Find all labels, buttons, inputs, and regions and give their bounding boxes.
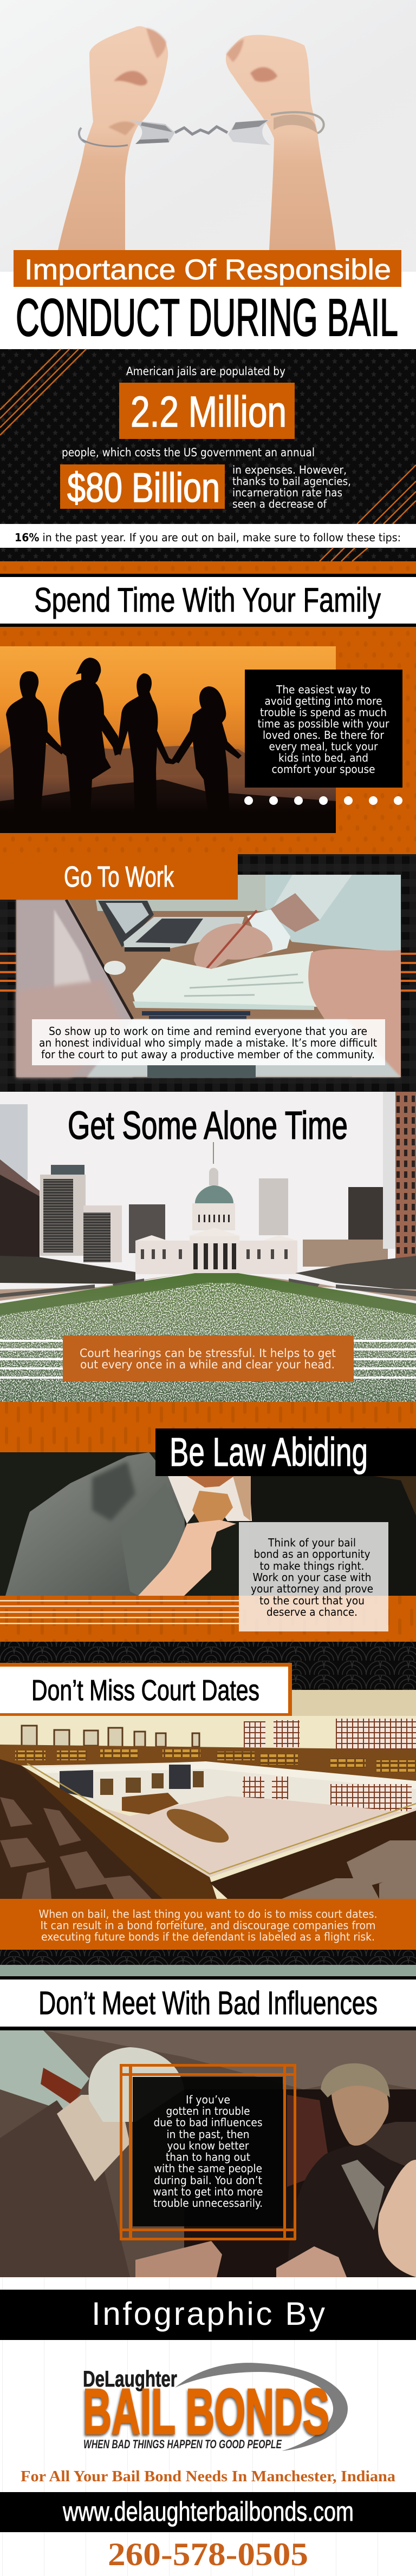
text box: bad influences: due to bad influences xyxy=(154,2116,262,2129)
photo: man adjusting tie xyxy=(0,1452,416,1596)
note: law abiding text: to the court that you xyxy=(259,1594,365,1607)
ceiling xyxy=(292,1690,416,1716)
panel: spend time with your family xyxy=(0,561,416,854)
heading: dont miss court dates xyxy=(0,1663,292,1716)
photo: old courthouse and city skyline xyxy=(0,1092,416,1402)
text box: bad influences: during bail. You don’t xyxy=(154,2174,262,2187)
panel: dont meet with bad influences xyxy=(0,1965,416,2277)
note: court dates text xyxy=(0,1899,416,1950)
left arm and fist xyxy=(58,26,168,250)
logo swoosh xyxy=(175,2363,348,2451)
note: go to work text: an honest individual who simply made a mistake. It’s more difficult xyxy=(39,1036,377,1049)
text box: family: trouble is spend as much xyxy=(260,706,387,719)
heading: spend time xyxy=(0,574,416,627)
text box: family: time as possible with your xyxy=(258,717,389,730)
silhouette: woman left xyxy=(6,671,64,833)
trees and street furniture xyxy=(0,1256,135,1284)
hand xyxy=(138,1520,236,1596)
gallery wood band xyxy=(0,1745,416,1784)
left cuff ring back xyxy=(79,128,126,146)
dark glass tower xyxy=(129,1204,165,1253)
rostrum xyxy=(122,1793,179,1814)
note: law abiding text: your attorney and prove xyxy=(251,1582,373,1595)
snow specks on lawn xyxy=(0,1283,416,1402)
ground bushes xyxy=(0,779,336,833)
right wall and seating xyxy=(210,1811,416,1899)
right hand foreground xyxy=(378,2160,416,2277)
band: sixteen percent tips xyxy=(0,524,416,548)
note: court dates text: When on bail, the last thing you want to do is to miss court dates. xyxy=(39,1908,377,1920)
railed wall left xyxy=(0,1766,217,1899)
white dots row xyxy=(244,796,402,805)
white cap xyxy=(88,2047,184,2122)
heading: dont miss court dates: Don’t Miss Court Dates xyxy=(31,1674,259,1707)
shirt sleeves xyxy=(265,875,401,953)
note: law abiding text xyxy=(239,1522,388,1631)
logo text: delaughter: DeLaughter xyxy=(83,2366,177,2391)
phone number: 260-578-0505 xyxy=(108,2536,308,2572)
note: go to work text: So show up to work on time and remind everyone that you are xyxy=(49,1025,367,1038)
stat: 2.2 million: 2.2 Million xyxy=(131,388,287,436)
text box: bad influences xyxy=(133,2077,283,2226)
logo: delaughter bail bonds xyxy=(83,2363,348,2451)
vote boards and portraits xyxy=(60,1765,191,1798)
note: court dates text: executing future bonds if the defendant is labeled as a flight risk. xyxy=(41,1930,375,1943)
interior dark xyxy=(184,2089,416,2277)
right jacket tint xyxy=(249,1476,416,1596)
text: annual cost: people, which costs the US government an annual xyxy=(62,446,315,459)
text box: bad influences: than to hang out xyxy=(166,2151,250,2164)
band: sixteen percent tips: 16% in the past year. If you are out on bail, make sure to follow these tips: xyxy=(15,531,401,544)
right man's jacket xyxy=(287,2143,416,2277)
left wrist band xyxy=(82,140,128,146)
phones and hands xyxy=(135,2241,222,2277)
laptop screen xyxy=(98,901,154,947)
hero section xyxy=(0,0,416,347)
lawn xyxy=(0,1273,416,1402)
white tower far right xyxy=(383,1092,398,1249)
note: go to work text: for the court to put away a productive member of the community. xyxy=(41,1048,375,1061)
stat: 2.2 million xyxy=(119,383,295,439)
silhouette: woman right xyxy=(171,686,242,833)
note: law abiding text: deserve a chance. xyxy=(266,1605,358,1618)
wall xyxy=(92,875,401,911)
note: go to work text xyxy=(32,1019,385,1065)
white stripes left xyxy=(0,1340,63,1379)
text box: family: loved ones. Be there for xyxy=(263,729,385,742)
white stripes right xyxy=(354,1340,416,1379)
panel: go to work xyxy=(0,854,416,1092)
courthouse xyxy=(135,1142,297,1274)
right hand xyxy=(308,949,401,1077)
blurred keyboard xyxy=(87,1019,401,1077)
banner: infographic by: Infographic By xyxy=(92,2296,325,2332)
shirt cuff xyxy=(247,909,290,954)
right man's face xyxy=(332,2072,389,2146)
text box: bad influences: If you’ve xyxy=(186,2093,230,2106)
dark tower right xyxy=(348,1187,386,1241)
paper xyxy=(133,951,320,1007)
text box: bad influences: with the same people xyxy=(154,2162,262,2175)
panel: be law abiding xyxy=(0,1402,416,1642)
text box: bad influences: gotten in trouble xyxy=(166,2105,250,2118)
glass tower left xyxy=(0,1104,28,1180)
right fist shading xyxy=(226,39,277,82)
upper windows xyxy=(244,1719,416,1754)
mouse xyxy=(104,961,126,975)
heading: go to work xyxy=(0,854,238,900)
text box: bad influences: trouble unnecessarily. xyxy=(153,2197,263,2210)
hilton building xyxy=(83,1205,122,1262)
panel: footer credits xyxy=(0,2277,416,2576)
text: expenses xyxy=(232,463,351,510)
stat: 80 billion: $80 Billion xyxy=(67,465,220,511)
text box: bad influences: want to get into more xyxy=(153,2185,263,2198)
note: court dates text: It can result in a bond forfeiture, and discourage companies from xyxy=(40,1919,376,1932)
paths and benches xyxy=(0,1274,179,1301)
lower windows xyxy=(243,1777,412,1811)
orange frame xyxy=(120,2064,296,2240)
panel: jail statistics xyxy=(0,349,416,524)
grey bag strap xyxy=(341,2160,385,2230)
right arm and fist xyxy=(226,35,336,250)
note: alone time text: out every once in a while and clear your head. xyxy=(80,1358,335,1371)
hair behind xyxy=(287,2095,330,2187)
text box: family: every meal, tuck your xyxy=(269,740,378,753)
text: jails populated: American jails are populated by xyxy=(126,365,285,378)
white tower right xyxy=(259,1178,288,1235)
balcony beam xyxy=(35,1761,416,1789)
tie xyxy=(192,1491,233,1526)
shirt collar xyxy=(168,1476,252,1524)
left man's jacket xyxy=(0,2100,130,2277)
photo: family silhouette at sunset xyxy=(0,646,336,833)
panel: dont miss court dates xyxy=(0,1642,416,1965)
dark brick building left xyxy=(0,1159,40,1283)
text box: family: comfort your spouse xyxy=(272,763,375,776)
pens xyxy=(142,1011,250,1019)
banner: infographic by xyxy=(0,2290,416,2340)
logo tagline: WHEN BAD THINGS HAPPEN TO GOOD PEOPLE xyxy=(83,2437,282,2451)
laptop base xyxy=(123,917,244,948)
text: service area: For All Your Bail Bond Needs In Manchester, Indiana xyxy=(21,2468,395,2485)
brick tower far right xyxy=(395,1092,416,1260)
pencil xyxy=(203,910,257,973)
ceiling xyxy=(43,2030,416,2089)
neck xyxy=(187,1476,234,1487)
left fist shading xyxy=(108,28,166,135)
note: law abiding text: to make things right. xyxy=(260,1559,364,1572)
writing hand xyxy=(194,923,272,969)
wrist xyxy=(265,893,320,932)
chamber floor xyxy=(65,1786,416,1877)
text box: family: avoid getting into more xyxy=(264,694,382,707)
brass rails xyxy=(27,1764,416,1874)
text: expenses: thanks to bail agencies, xyxy=(232,475,351,488)
photo: desk with laptop and paperwork xyxy=(16,875,401,1077)
note: law abiding text: bond as an opportunity xyxy=(253,1548,370,1561)
note: alone time text: Court hearings can be stressful. It helps to get xyxy=(80,1347,336,1360)
gallery seats xyxy=(15,1749,416,1772)
photo: handcuffed raised fists xyxy=(0,0,416,272)
office tower xyxy=(40,1175,86,1256)
right man's cap xyxy=(321,2063,390,2097)
photo: empty legislative chamber xyxy=(0,1690,416,1899)
silhouette: man with cap xyxy=(58,658,121,833)
cream stripes xyxy=(0,1600,239,1624)
handcuffs xyxy=(130,112,324,145)
text box: family: The easiest way to xyxy=(276,683,370,696)
note: alone time text xyxy=(63,1335,354,1381)
text box: family xyxy=(245,670,402,788)
strip: patterned black xyxy=(0,548,416,561)
text: expenses: seen a decrease of xyxy=(232,497,327,510)
banner: importance of responsible: Importance Of Responsible xyxy=(24,254,391,286)
stacked chairs xyxy=(162,1802,233,1849)
banner: website xyxy=(0,2492,416,2532)
orange stripes left xyxy=(0,953,16,992)
text: expenses: incarneration rate has xyxy=(232,486,342,499)
text: expenses: in expenses. However, xyxy=(232,463,347,476)
heading: go to work: Go To Work xyxy=(64,861,174,893)
lower wall xyxy=(27,1762,416,1811)
panel: get some alone time xyxy=(0,1092,416,1402)
text box: bad influences: in the past, then xyxy=(167,2128,249,2141)
right wrist shadow band xyxy=(274,115,317,133)
grey jacket xyxy=(5,1452,187,1596)
silhouette: woman centre xyxy=(117,673,177,833)
text box: family: kids into bed, and xyxy=(278,751,368,764)
blurred foreground laptop screen xyxy=(16,900,133,1077)
low brown building xyxy=(303,1240,388,1267)
orange stripes right xyxy=(401,953,416,992)
seat top left xyxy=(0,2030,89,2111)
note: law abiding text: Work on your case with xyxy=(252,1571,372,1584)
text box: bad influences: you know better xyxy=(167,2139,249,2152)
photo: group of friends in a limo xyxy=(0,1965,416,2277)
neck with tattoo xyxy=(57,2095,130,2181)
upper wall frames xyxy=(22,1726,199,1747)
diagonal stripes bottom right xyxy=(357,465,416,524)
left seating xyxy=(0,1759,162,1899)
heading: dont meet with bad influences xyxy=(0,1976,416,2030)
note: law abiding text: Think of your bail xyxy=(268,1536,356,1549)
diagonal stripes top left xyxy=(0,349,86,435)
